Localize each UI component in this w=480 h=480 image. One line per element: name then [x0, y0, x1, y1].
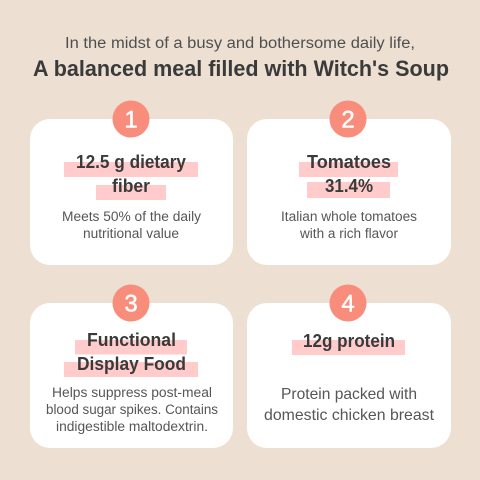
description 2: Italian whole tomatoes — [281, 209, 417, 224]
description 1: Meets 50% of the daily — [62, 209, 201, 224]
badge 1 — [112, 100, 150, 138]
heading 2 — [307, 152, 391, 196]
highlight bar 4 — [292, 340, 405, 355]
description 4 — [264, 386, 435, 424]
description 3: blood sugar spikes. Contains — [46, 402, 218, 417]
heading 4: 12g protein — [303, 331, 395, 351]
badge 3 — [112, 284, 150, 322]
heading 1 — [76, 152, 186, 196]
description 3: Helps suppress post-meal — [52, 385, 212, 400]
heading 1: fiber — [112, 176, 150, 196]
description 1 — [62, 209, 201, 241]
heading 2: 31.4% — [325, 176, 373, 196]
description 1: nutritional value — [83, 226, 179, 241]
description 3: indigestible maltodextrin. — [56, 419, 208, 434]
badge 2: 2 — [341, 106, 355, 134]
panel: card 2 tomatoes — [247, 100, 451, 265]
badge 1: 1 — [124, 106, 138, 134]
highlight bars 2 — [299, 162, 398, 198]
heading 2: Tomatoes — [307, 152, 391, 172]
subtitle: In the midst of a busy and bothersome daily life, — [65, 35, 415, 52]
description 2 — [281, 209, 417, 241]
panel: card 1 dietary fiber — [30, 100, 233, 265]
heading 3: Display Food — [77, 354, 186, 374]
highlight bars 3 — [64, 340, 198, 377]
description 2: with a rich flavor — [299, 226, 398, 241]
heading 3: Functional — [87, 330, 176, 350]
panel: card 4 protein — [247, 284, 451, 448]
badge 4: 4 — [341, 290, 355, 318]
badge 4 — [330, 284, 366, 322]
title: A balanced meal filled with Witch's Soup — [33, 56, 449, 81]
description 4: domestic chicken breast — [264, 407, 435, 424]
heading 1: 12.5 g dietary — [76, 152, 186, 172]
highlight bars 1 — [64, 162, 198, 200]
panel: card 3 functional display food — [30, 284, 233, 448]
header — [33, 35, 449, 81]
description 4: Protein packed with — [281, 386, 417, 403]
description 3 — [46, 385, 218, 434]
heading 3 — [77, 330, 186, 374]
badge 2 — [330, 100, 366, 138]
badge 3: 3 — [124, 290, 138, 318]
